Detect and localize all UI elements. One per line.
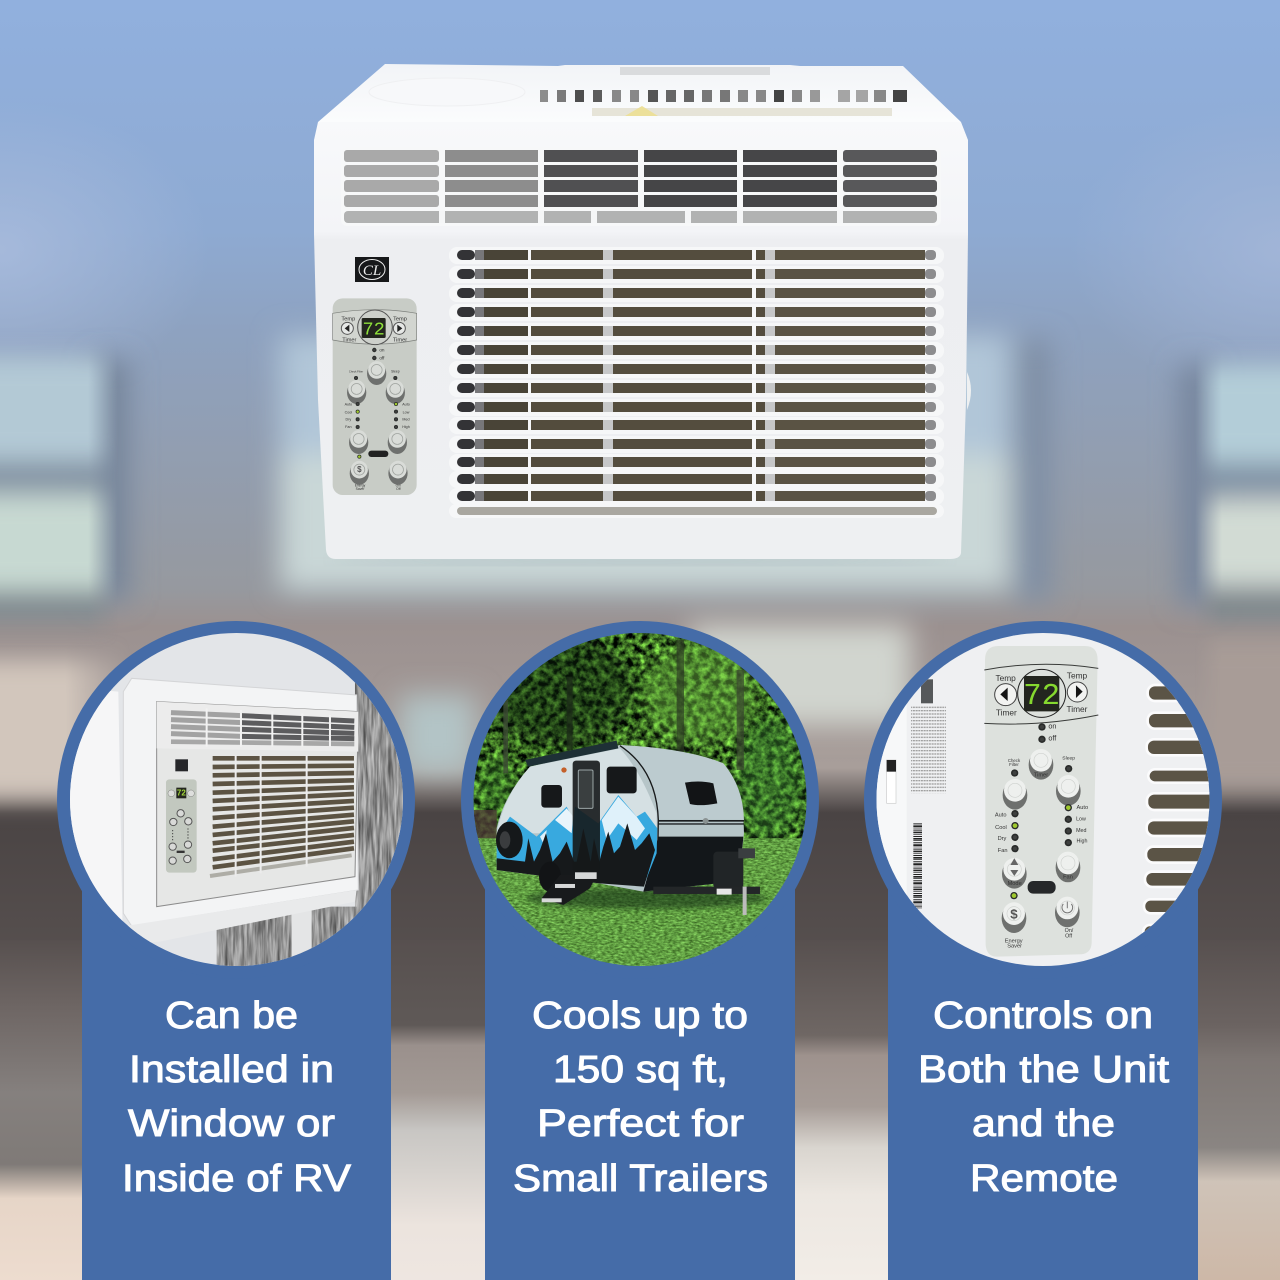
control panel: Sleep (391, 369, 400, 373)
steps (542, 878, 593, 905)
photo: control panel close-up: Temp (1067, 670, 1088, 680)
control panel: Off (396, 487, 401, 491)
blue ring 1 (57, 621, 415, 979)
control panel: High (402, 425, 410, 429)
photo: control panel close-up: Fan (998, 848, 1008, 854)
blue column 3 (888, 880, 1198, 1280)
photo: control panel close-up: Low (1076, 817, 1086, 823)
photo: control panel close-up: Sleep (1062, 755, 1075, 761)
feature 3: controls (864, 620, 1228, 1280)
photo: control panel close-up: Filter (1009, 762, 1019, 767)
photo: control panel close-up: Dry (998, 836, 1007, 842)
control panel (333, 298, 417, 495)
caption 3: Controls on (933, 995, 1153, 1037)
control panel: 72 (362, 318, 385, 340)
control panel: Temp (393, 317, 407, 323)
control panel: on (379, 348, 385, 353)
caption 1: Window or (128, 1103, 335, 1145)
photo: control panel close-up: on (1048, 721, 1056, 730)
photo: control panel close-up: High (1076, 839, 1087, 845)
photo: trailer in forest (474, 633, 806, 966)
propane tank and tongue (713, 852, 743, 888)
control panel: Auto (402, 403, 410, 407)
control panel: Cool (345, 410, 352, 414)
roof awning (525, 741, 618, 767)
caption 1 (122, 995, 352, 1200)
caption 2 (513, 995, 768, 1200)
rating label and barcode (911, 679, 946, 793)
blue column 1 (82, 880, 391, 1280)
control panel: Timer (342, 338, 357, 344)
control panel: Timer (393, 338, 407, 344)
grille slots (1142, 684, 1210, 934)
caption 2: 150 sq ft, (553, 1049, 728, 1091)
photo: control panel close-up: On/ (1065, 928, 1074, 934)
caption 1: Inside of RV (122, 1158, 352, 1200)
control panel: On/ (396, 484, 401, 488)
feature 2: travel trailer (460, 620, 820, 1280)
photo: control panel close-up: Mode (1008, 881, 1022, 887)
photo: control panel close-up: off (1048, 734, 1057, 743)
control panel: Check Filter (349, 369, 363, 373)
brand logo (355, 257, 389, 282)
caption 3: Remote (970, 1158, 1118, 1200)
photo: control panel close-up: Off (1065, 933, 1073, 939)
photo: control panel close-up: $ (1010, 906, 1018, 921)
control panel: Dry (345, 418, 351, 422)
air conditioner unit (314, 64, 971, 564)
top face of unit (318, 64, 961, 122)
photo: control panel close-up (876, 633, 1210, 966)
photo: control panel close-up: Timer (1066, 704, 1088, 714)
photo: control panel close-up: Check (1008, 758, 1021, 763)
photo: control panel close-up: Cool (995, 825, 1007, 831)
soft shadow under unit (330, 556, 950, 564)
mural (497, 795, 657, 887)
side knob (967, 372, 971, 410)
caption 3: and the (972, 1103, 1115, 1145)
wheels (496, 822, 523, 858)
lower intake grille (449, 247, 944, 518)
control panel: off (379, 356, 385, 361)
photo: control panel close-up: Auto (1076, 805, 1088, 811)
caption 1: Can be (165, 995, 298, 1037)
caption 3: Both the Unit (918, 1049, 1170, 1091)
caption 2: Small Trailers (513, 1158, 768, 1200)
photo: control panel close-up: Timer (1034, 773, 1048, 779)
upper vent (341, 147, 941, 226)
photo: control panel close-up: Saver (1007, 943, 1022, 949)
photo: control panel close-up: Fan (1063, 875, 1073, 881)
control panel: Temp (341, 317, 355, 323)
photo: control panel close-up: Temp (995, 673, 1016, 683)
feature 1: window install (57, 620, 420, 1280)
photo: control panel close-up: Auto (995, 813, 1006, 819)
photo: unit installed in wall: 72 (177, 789, 186, 798)
caption 2: Perfect for (537, 1103, 744, 1145)
photo: control panel close-up: Med (1076, 828, 1087, 834)
door (573, 761, 600, 872)
control panel: Med (402, 418, 410, 422)
control panel: Low (403, 410, 410, 414)
control panel: Fan (345, 425, 351, 429)
photo: control panel close-up: 72 (1023, 679, 1060, 714)
blue ring 2 (461, 621, 819, 979)
trailer body (497, 745, 744, 892)
photo: control panel close-up: Energy (1005, 938, 1023, 944)
control panel: $ (357, 465, 362, 474)
front face of unit (314, 122, 968, 559)
windows (541, 785, 562, 808)
caption 1: Installed in (129, 1049, 334, 1091)
blue ring 3 (864, 621, 1222, 979)
mural tree silhouettes (497, 823, 655, 887)
control panel: Saver (356, 487, 365, 491)
photo: unit installed in wall (70, 633, 403, 966)
control panel face (985, 646, 1098, 957)
control panel: Energy (355, 484, 366, 488)
brand logo: CL (363, 263, 381, 279)
photo: control panel close-up: Timer (996, 707, 1017, 717)
caption 2: Cools up to (532, 995, 748, 1037)
control panel: Auto (345, 403, 352, 407)
caption 3 (918, 995, 1170, 1200)
blue column 2 (485, 880, 795, 1280)
